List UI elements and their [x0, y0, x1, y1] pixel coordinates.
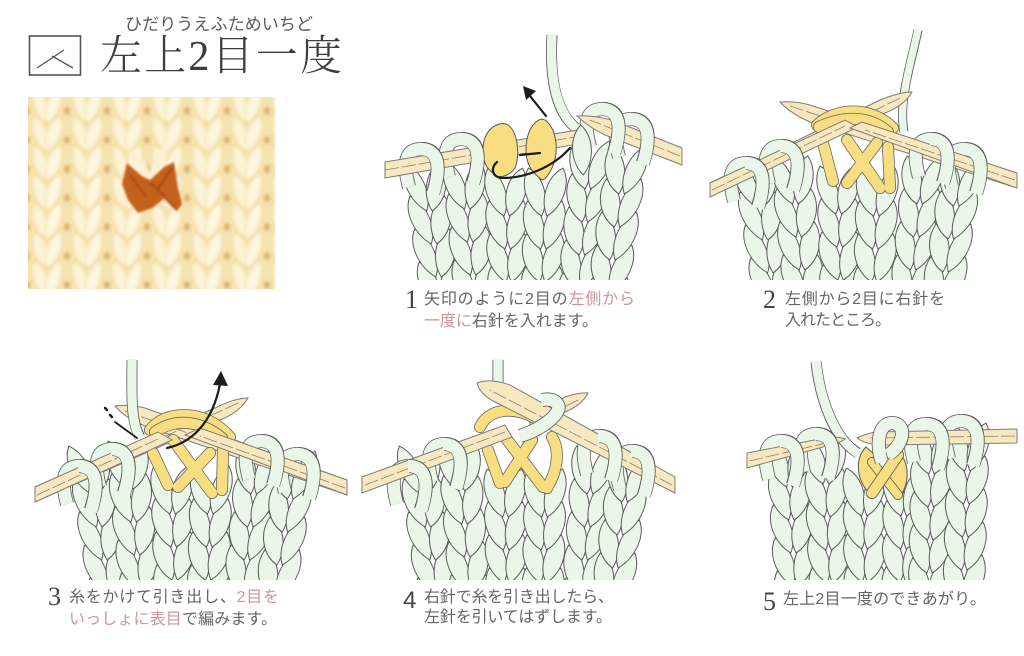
finished white loop	[879, 423, 902, 462]
fabric	[66, 440, 318, 580]
back loops	[766, 421, 978, 485]
new white loop on right needle	[520, 400, 559, 436]
caption 5: 左上2目一度のできあがり。	[783, 590, 986, 608]
caption 1: 矢印のように2目の左側から	[424, 290, 635, 308]
panel: step 5	[746, 360, 1018, 610]
fabric	[768, 422, 989, 580]
fabric	[396, 445, 646, 580]
panel: step 4	[362, 359, 675, 652]
panel: step 1	[385, 34, 682, 351]
front loop legs	[780, 421, 978, 486]
arrow: needle insertion path	[493, 86, 570, 178]
title reading: ひだりうえふためいちど	[125, 15, 313, 34]
caption 4: 左針を引いてはずします。	[424, 608, 612, 626]
fabric	[406, 140, 647, 280]
needle tips	[710, 92, 1017, 197]
caption 2: 左側から2目に右針を	[785, 290, 945, 308]
decrease stitch in rust	[122, 140, 182, 213]
yellow stitches	[150, 415, 230, 493]
caption 5	[763, 587, 986, 616]
panel: step 3	[35, 359, 347, 649]
fabric	[734, 156, 978, 280]
caption 2	[763, 285, 945, 329]
stitch leaf over needle end	[571, 125, 593, 175]
caption 4: 4	[403, 587, 416, 614]
front loop legs	[78, 441, 314, 511]
back loops	[64, 441, 314, 510]
caption 5: 5	[763, 587, 776, 616]
caption 3: いっしょに表目で編みます。	[69, 610, 277, 628]
left needle tip	[530, 393, 588, 430]
panel: step 2	[710, 29, 1017, 351]
caption 2: 入れたところ。	[785, 311, 891, 329]
photo: knitted swatch	[28, 97, 275, 289]
caption 3: 3	[48, 582, 61, 611]
front loop legs	[420, 109, 648, 194]
left needle	[747, 437, 845, 468]
yellow stitches	[817, 112, 893, 188]
yellow stitches	[480, 411, 557, 488]
caption 3	[48, 582, 279, 628]
title: 左上2目一度	[100, 34, 342, 80]
working yarn	[551, 34, 577, 129]
caption 1: 一度に右針を入れます。	[424, 312, 598, 330]
back loops	[394, 436, 649, 510]
left needle	[385, 130, 578, 178]
needle shafts in front	[35, 428, 347, 502]
back loops	[731, 139, 981, 207]
right needle	[577, 116, 682, 165]
caption 1	[405, 285, 635, 330]
working yarn	[132, 359, 140, 438]
caption 4: 右針で糸を引き出したら、	[424, 588, 614, 606]
needle shafts in front	[710, 120, 1017, 197]
working yarn	[903, 29, 918, 133]
front loop legs	[745, 139, 981, 208]
right needle	[477, 381, 675, 493]
needle tips	[35, 398, 347, 502]
left needle shaft	[362, 425, 512, 493]
yellow decreased stitch	[858, 447, 907, 497]
working yarn	[816, 361, 859, 454]
caption 4	[403, 587, 614, 626]
working yarn	[492, 359, 504, 401]
caption 2: 2	[763, 285, 776, 314]
yellow stitches	[483, 119, 556, 180]
caption 3: 糸をかけて引き出し、2目を	[69, 588, 279, 606]
back loops	[406, 109, 648, 193]
right needle	[857, 429, 1017, 445]
caption 1: 1	[405, 285, 418, 314]
chart symbol icon	[30, 36, 80, 75]
arrow: pull yarn through	[105, 371, 228, 448]
front loop legs	[408, 436, 649, 511]
